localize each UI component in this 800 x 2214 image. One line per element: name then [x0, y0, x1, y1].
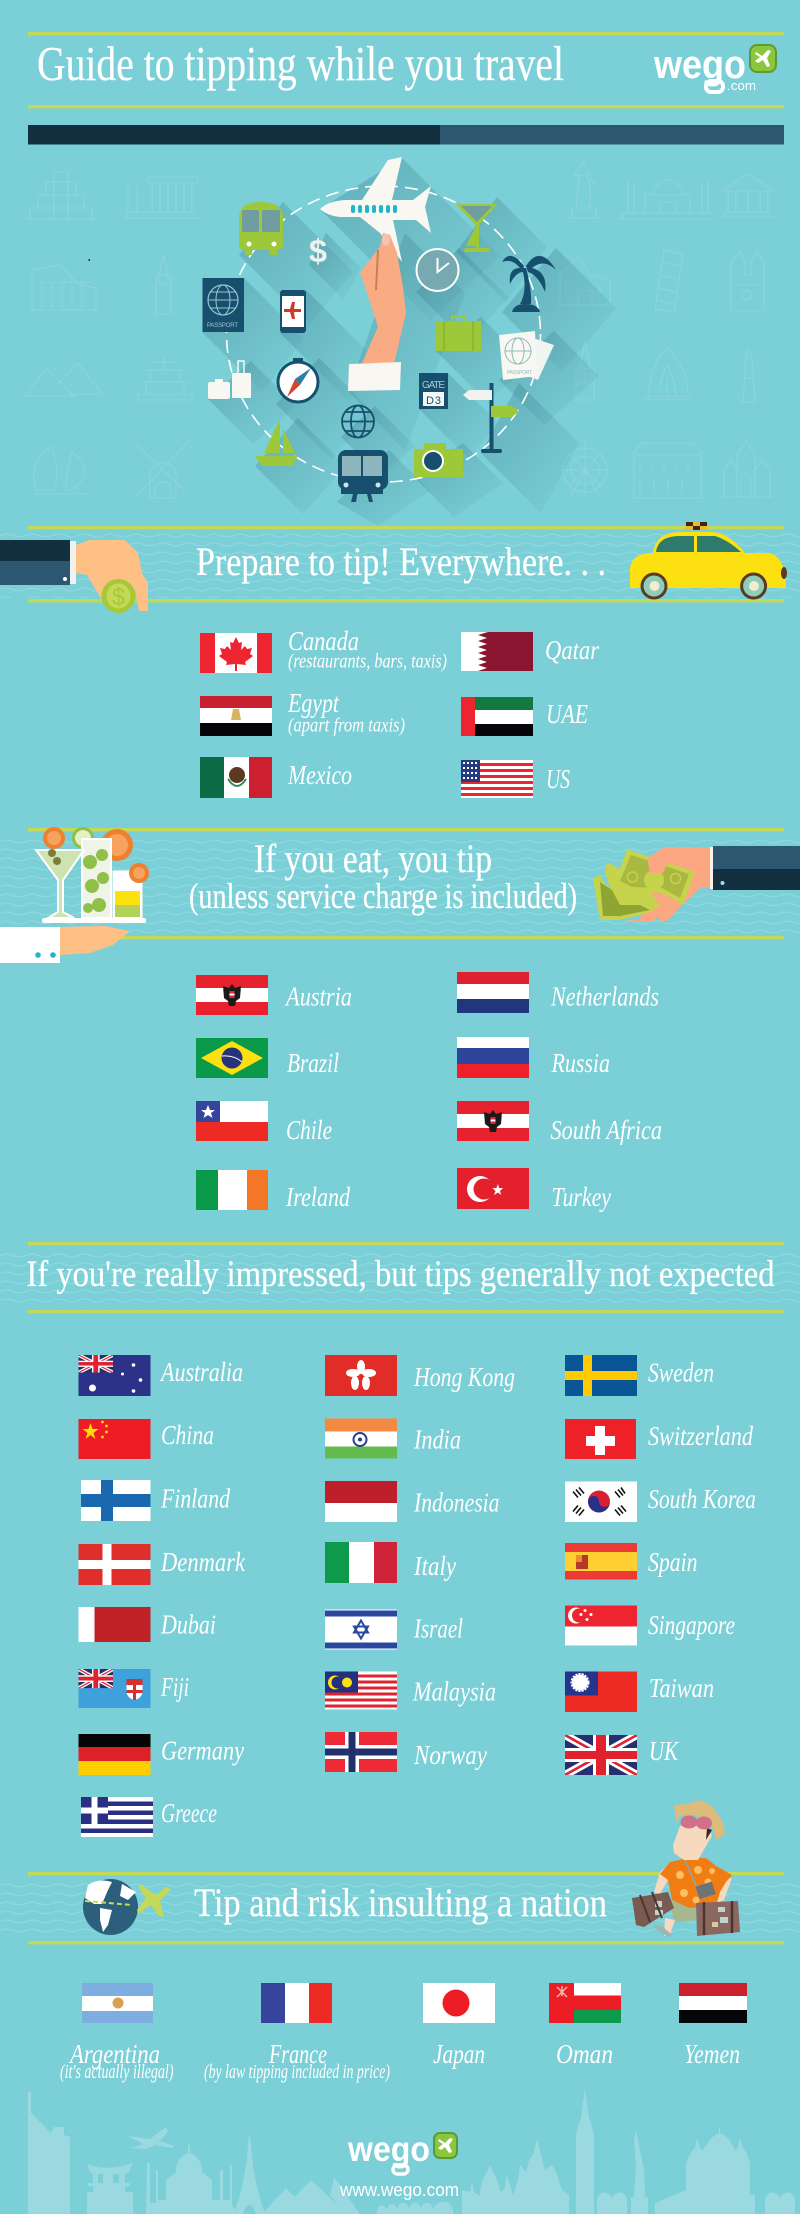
icon: dollar sign: $: [309, 233, 327, 269]
label: UAE: UAE: [546, 699, 588, 729]
icon: martini: [456, 204, 497, 252]
icon: compass: [278, 358, 318, 402]
label: Italy: Italy: [413, 1551, 456, 1581]
flag: South Africa: [457, 1101, 529, 1141]
label: Australia: Australia: [159, 1357, 243, 1387]
label: France: France: [268, 2039, 327, 2069]
icon: footer logo badge: [434, 2133, 457, 2158]
flag: Sweden: [565, 1355, 637, 1396]
label: Denmark: Denmark: [160, 1547, 246, 1577]
icon: white passports: [499, 331, 554, 380]
dashed circle: [226, 186, 540, 482]
section heading: risk insulting: Tip and risk insulting a nation: [194, 1880, 607, 1925]
icon: taxi: [630, 522, 787, 600]
label: Malaysia: Malaysia: [412, 1676, 496, 1706]
section band: prepare to tip: [0, 526, 800, 602]
label: Netherlands: Netherlands: [550, 982, 659, 1012]
icon: navy passport: [202, 278, 244, 332]
icon: clock: [416, 249, 458, 291]
dark header bar: [28, 125, 784, 144]
flag: Ireland: [196, 1170, 268, 1210]
section band: risk insulting: [0, 1872, 800, 1944]
label: Argentina: Argentina: [68, 2039, 160, 2069]
icon: globe: [342, 406, 374, 438]
flag: Germany: [78, 1734, 150, 1775]
flag: Brazil: [196, 1038, 268, 1078]
label: US: US: [546, 764, 570, 794]
header rules: [28, 32, 784, 108]
icon: sailboat: [255, 418, 298, 466]
flag: Argentina: [82, 1983, 153, 2023]
icon: gate sign: D3: [426, 395, 441, 407]
icon: white luggage: [208, 361, 251, 399]
flag: Hong Kong: [325, 1355, 397, 1396]
section band: if you eat: [0, 828, 800, 939]
flag: Italy: [325, 1542, 397, 1583]
icon: white passports: PASSPORT: [507, 370, 532, 376]
icon: globe and plane: [83, 1879, 171, 1935]
icon: gate sign: [419, 373, 448, 409]
label: France: [204, 2039, 390, 2083]
title: Guide to tipping while you travel: [37, 36, 564, 91]
flag: India: [325, 1418, 397, 1458]
flag: Qatar: [461, 632, 533, 671]
flag: Switzerland: [565, 1419, 636, 1459]
label: South Africa: South Africa: [550, 1115, 662, 1145]
label: Fiji: Fiji: [160, 1672, 189, 1702]
icon: cocktails on a tray: [0, 827, 149, 963]
label: Singapore: Singapore: [648, 1610, 735, 1640]
icon: camera: [414, 443, 463, 477]
label: Taiwan: Taiwan: [649, 1673, 714, 1703]
label: Finland: Finland: [160, 1484, 230, 1514]
section heading: if you eat: [189, 836, 577, 916]
label: Germany: Germany: [161, 1736, 244, 1766]
icon: signpost: [463, 383, 519, 453]
flag: Malaysia: [325, 1672, 397, 1710]
label: Canada: [288, 626, 447, 672]
label: Russia: Russia: [551, 1048, 610, 1078]
label: Ireland: Ireland: [285, 1182, 350, 1212]
label: Mexico: Mexico: [287, 760, 352, 790]
label: Canada: Canada: [288, 626, 359, 656]
wego logo: wego: [653, 43, 746, 87]
long shadows: [202, 158, 616, 526]
flag: Finland: [81, 1480, 150, 1521]
label: Egypt: (apart from taxis): [288, 714, 405, 736]
flag: Denmark: [78, 1544, 150, 1585]
label: Hong Kong: Hong Kong: [413, 1362, 515, 1392]
label: Switzerland: Switzerland: [648, 1421, 753, 1451]
flag: Israel: [325, 1610, 397, 1650]
label: UK: UK: [649, 1736, 680, 1766]
flag: Netherlands: [457, 972, 529, 1013]
label: Japan: Japan: [433, 2039, 485, 2069]
illustration: traveller: [632, 1800, 740, 1937]
icon: green suitcase: [436, 317, 481, 351]
label: Argentina: [60, 2039, 174, 2083]
label: Egypt: Egypt: [287, 688, 340, 718]
label: Egypt: [287, 688, 405, 736]
wego logo: .com: [727, 78, 756, 93]
icon: hand with banknotes: [593, 846, 800, 922]
label: India: India: [413, 1424, 461, 1454]
section heading: if you eat: (unless service charge is included): [189, 876, 577, 916]
icon: navy bus: [338, 450, 388, 502]
flag: Taiwan: [565, 1672, 637, 1712]
label: Argentina: (it's actually illegal): [60, 2061, 174, 2083]
flag: Chile: [196, 1101, 268, 1141]
flag: Oman: [549, 1983, 621, 2023]
flag: Dubai: [78, 1607, 150, 1642]
label: Yemen: Yemen: [684, 2039, 740, 2069]
tiny speck: [88, 259, 90, 261]
label: China: China: [161, 1420, 214, 1450]
label: Austria: Austria: [284, 982, 352, 1012]
flag: UAE: [461, 697, 533, 736]
label: Oman: Oman: [556, 2039, 613, 2069]
flag: Japan: [423, 1983, 495, 2023]
flag: South Korea: [565, 1482, 637, 1522]
label: Dubai: Dubai: [160, 1610, 216, 1640]
label: Turkey: Turkey: [552, 1182, 611, 1212]
flag: Australia: [78, 1355, 150, 1396]
label: Sweden: Sweden: [648, 1358, 714, 1388]
label: Greece: Greece: [161, 1798, 217, 1828]
label: Indonesia: Indonesia: [413, 1488, 500, 1518]
flag: Egypt: [200, 696, 272, 736]
flag: Canada: [200, 633, 272, 673]
icon: hand with coin: $: [112, 584, 125, 611]
flag: Indonesia: [325, 1481, 397, 1522]
label: Norway: Norway: [413, 1740, 487, 1770]
label: Canada: (restaurants, bars, taxis): [288, 650, 447, 672]
icon: logo badge: [750, 45, 776, 72]
flag: Norway: [325, 1732, 397, 1772]
section heading: if you eat: If you eat, you tip: [254, 836, 492, 881]
flag: Greece: [81, 1797, 153, 1837]
flag: Singapore: [565, 1606, 637, 1646]
label: France: (by law tipping included in price): [204, 2061, 390, 2083]
label: Israel: Israel: [413, 1614, 463, 1644]
icon: palm tree: [502, 256, 556, 312]
flag: France: [261, 1983, 332, 2023]
footer skyline silhouettes: [28, 2088, 795, 2214]
icon: green bus: [239, 202, 283, 255]
icon: navy passport: PASSPORT: [207, 323, 238, 329]
flag: Mexico: [200, 757, 272, 798]
flag: Austria: [196, 975, 268, 1015]
faint landmark outlines: [25, 162, 774, 498]
flag: Russia: [457, 1037, 529, 1078]
icon: airplane: [320, 157, 431, 262]
footer wego logo: wego: [347, 2130, 430, 2169]
label: Qatar: Qatar: [545, 635, 599, 665]
icon: phone: [280, 290, 306, 333]
icon: gate sign: GATE: [422, 380, 445, 391]
icon: hand with coin: [0, 540, 148, 613]
section band: really impressed: [0, 1242, 800, 1313]
flag: Turkey: [457, 1168, 529, 1209]
section heading: prepare to tip: Prepare to tip! Everywhere. . .: [196, 539, 606, 584]
flag: US: [461, 760, 533, 798]
label: Chile: Chile: [286, 1115, 332, 1145]
flag: Spain: [565, 1543, 637, 1580]
footer url: www.wego.com: [339, 2180, 459, 2200]
label: Brazil: Brazil: [287, 1048, 339, 1078]
flag: Fiji: [78, 1669, 150, 1708]
flag: Yemen: [679, 1983, 747, 2023]
label: South Korea: South Korea: [648, 1484, 756, 1514]
icon: hand holding plane: [348, 233, 406, 391]
flag: UK: [565, 1735, 637, 1775]
flag: China: [78, 1419, 150, 1459]
label: Spain: Spain: [648, 1547, 698, 1577]
